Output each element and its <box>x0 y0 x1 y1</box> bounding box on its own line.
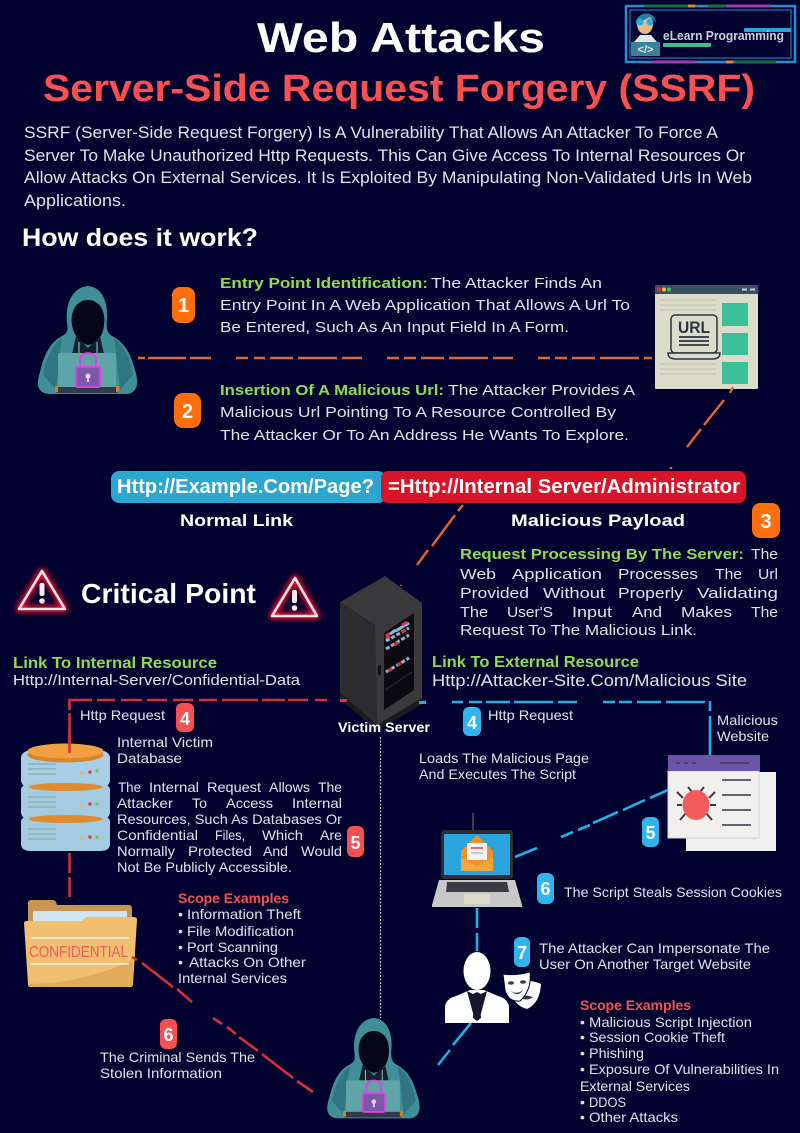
link to external resource: Http://Attacker-Site.Com/Malicious Site <box>432 672 747 690</box>
icon: confidential folder <box>24 900 137 987</box>
scope examples: external: External Services <box>580 1078 690 1094</box>
link to external resource <box>432 654 747 690</box>
text: internal request explanation: Are <box>320 827 342 843</box>
label: internal victim database: Database <box>117 750 182 766</box>
label: malicious website: Malicious <box>717 712 778 728</box>
badge 3: 3 <box>760 511 772 533</box>
arrow: browser to link <box>671 387 733 469</box>
title: Web Attacks <box>257 14 545 61</box>
badge 6 blue: 6 <box>540 879 551 899</box>
scope examples: external: • <box>580 1029 585 1045</box>
badge 4 red: 4 <box>180 709 190 729</box>
icon: theatre masks <box>503 972 541 1009</box>
scope examples: external <box>580 997 779 1125</box>
badge 7: 7 <box>517 943 527 963</box>
text: loads the malicious page: Loads The Malicious Page <box>419 750 589 766</box>
icon: server rack <box>340 576 426 731</box>
text: script steals cookies: The Script Steals Session Cookies <box>564 884 782 900</box>
arrow: database to folder <box>68 853 71 897</box>
text: internal request explanation: Confidential <box>117 827 198 843</box>
step 3 text: The <box>751 546 778 563</box>
icon: warning triangle left <box>19 571 65 609</box>
step 3 text: Validating <box>697 585 778 602</box>
arrow: server to internal database <box>70 700 347 753</box>
text: internal request explanation: Which <box>262 827 303 843</box>
scope examples: internal: Internal Services <box>178 970 287 986</box>
step 1 text: The Attacker Finds An <box>431 275 602 292</box>
scope examples: external: Exposure Of Vulnerabilities In <box>589 1061 779 1077</box>
text: attacker impersonates user <box>539 940 770 972</box>
badge 3 <box>752 503 780 538</box>
text: internal request explanation: Protected <box>188 843 252 859</box>
text: internal request explanation: The <box>318 779 342 795</box>
icon: impersonator silhouette <box>445 952 509 1023</box>
badge 6 red <box>160 1019 177 1049</box>
line: into database <box>68 735 71 753</box>
step 2 text: The Attacker Provides A <box>448 382 635 399</box>
label: internal victim database <box>117 734 213 766</box>
link to internal resource <box>13 655 301 689</box>
link to internal resource: Link To Internal Resource <box>13 655 217 672</box>
intro paragraph: Server To Make Unauthorized Http Requests. This Can Give Access To Internal Resources Or <box>24 147 746 165</box>
logo: eLearn Programming: eLearn Programming <box>663 28 784 43</box>
badge 2 <box>174 393 201 428</box>
step 3 text: Request Processing By The Server: <box>460 546 744 563</box>
arrow: link to server <box>417 505 463 565</box>
badge 4 red <box>176 703 194 732</box>
intro paragraph: Applications. <box>24 192 126 210</box>
step 3 text: Properly <box>618 585 684 602</box>
step 1 text: Be Entered, Such As An Input Field In A Form. <box>220 319 569 336</box>
step 3 text: Input <box>572 604 613 621</box>
step 1 text <box>220 275 630 336</box>
scope examples: external: Other Attacks <box>589 1109 678 1125</box>
badge 1: 1 <box>178 295 189 317</box>
icon: confidential folder: CONFIDENTIAL <box>29 944 128 961</box>
icon: hacker bottom <box>327 1018 420 1118</box>
label: normal link: Normal Link <box>180 511 294 530</box>
scope examples: external: • <box>580 1061 585 1077</box>
step 1 text: Entry Point Identification: <box>220 275 428 292</box>
text: internal request explanation <box>117 779 342 875</box>
badge 6 red: 6 <box>163 1025 174 1045</box>
step 1 text: Entry Point In A Web Application That Allows A Url To <box>220 297 630 314</box>
scope examples: internal: • <box>178 939 183 955</box>
scope examples: external: Session Cookie Theft <box>589 1029 725 1045</box>
url bar: normal link <box>111 471 386 503</box>
scope examples: external: • <box>580 1094 585 1110</box>
step 3 text: Provided <box>460 585 529 602</box>
text: internal request explanation: Request <box>207 779 261 795</box>
icon: malicious site window with bug <box>668 755 776 851</box>
text: internal request explanation: Not Be Publicly Accessible. <box>117 859 292 875</box>
step 3 text: The <box>751 604 778 621</box>
badge 2: 2 <box>182 401 193 423</box>
step 2 text: The Attacker Or To An Address He Wants To Explore. <box>220 427 629 444</box>
arrow: malicious site to laptop <box>515 790 668 857</box>
scope examples: internal: • <box>178 954 183 970</box>
label: malicious website <box>717 712 778 744</box>
step 3 text: User'S <box>507 604 553 621</box>
scope examples: internal: File Modification <box>187 923 294 939</box>
scope examples: internal: Attacks On Other <box>189 954 306 970</box>
logo: eLearn Programming: </> <box>638 44 653 56</box>
badge 5 blue <box>642 817 659 847</box>
scope examples: external: Phishing <box>589 1045 644 1061</box>
step 3 text: Web <box>460 566 496 583</box>
arrow: dotted server to hacker <box>380 737 382 1018</box>
text: internal request explanation: Internal <box>149 779 199 795</box>
label: malicious website: Website <box>717 728 769 744</box>
step 3 text: Without <box>543 585 606 602</box>
step 3 text: Url <box>758 566 778 583</box>
scope examples: internal: Information Theft <box>187 906 301 922</box>
heading: how does it work: How does it work? <box>22 224 258 252</box>
badge 6 blue <box>537 873 554 904</box>
step 3 text: The <box>715 566 742 583</box>
step 3 text: Processes <box>618 566 698 583</box>
scope examples: external: • <box>580 1109 585 1125</box>
label: victim server: Victim Server <box>338 720 431 735</box>
url bar: malicious payload: =Http://Internal Server/Administrator <box>388 476 740 498</box>
text: internal request explanation: Files, <box>215 827 245 843</box>
scope examples: internal <box>178 890 306 986</box>
step 3 text <box>460 546 778 639</box>
step 3 text: Makes <box>681 604 732 621</box>
heading: critical point: Critical Point <box>81 578 256 609</box>
text: loads the malicious page <box>419 750 589 782</box>
icon: hacker top <box>38 286 137 394</box>
text: criminal sends stolen information: The Criminal Sends The <box>100 1049 255 1065</box>
text: criminal sends stolen information <box>100 1049 255 1081</box>
text: internal request explanation: Attacker <box>117 795 173 811</box>
badge 5 red: 5 <box>350 833 361 853</box>
link to internal resource: Http://Internal-Server/Confidential-Data <box>13 672 301 689</box>
arrow: folder to hacker <box>132 957 313 1092</box>
scope examples: internal: • <box>178 906 183 922</box>
text: internal request explanation: And <box>263 843 288 859</box>
step 3 text: The <box>460 604 488 621</box>
text: internal request explanation: Internal <box>292 795 342 811</box>
badge 5 red <box>347 826 364 857</box>
scope examples: external: • <box>580 1045 585 1061</box>
subtitle: Server-Side Request Forgery (SSRF) <box>43 68 755 110</box>
icon: database <box>21 744 110 851</box>
logo: eLearn Programming <box>626 6 795 62</box>
scope examples: external: Scope Examples <box>580 997 691 1013</box>
step 2 text: Malicious Url Pointing To A Resource Controlled By <box>220 404 617 421</box>
text: internal request explanation: Resources, Such As Databases Or <box>117 811 342 827</box>
text: internal request explanation: Access <box>226 795 273 811</box>
icon: warning triangle right <box>272 578 317 616</box>
scope examples: internal: Scope Examples <box>178 890 289 906</box>
arrow: hacker to browser <box>138 357 652 359</box>
text: internal request explanation: Would <box>301 843 342 859</box>
step 2 text: Insertion Of A Malicious Url: <box>220 382 444 399</box>
step 3 text: Application <box>512 566 602 583</box>
text: internal request explanation: To <box>192 795 207 811</box>
url bar: malicious payload <box>381 471 746 503</box>
text: attacker impersonates user: User On Another Target Website <box>539 956 751 972</box>
scope examples: external: Malicious Script Injection <box>589 1014 752 1030</box>
arrow: impersonator to hacker <box>438 1023 471 1065</box>
text: loads the malicious page: And Executes The Script <box>419 766 576 782</box>
step 3 text: Request To The Malicious Link. <box>460 622 697 639</box>
text: internal request explanation: Normally <box>117 843 175 859</box>
badge 1 <box>172 287 195 323</box>
label: http request left: Http Request <box>80 707 165 723</box>
scope examples: internal: Port Scanning <box>187 939 278 955</box>
intro paragraph: Allow Attacks On External Services. It Is Exploited By Manipulating Non-Validated Urls In Web <box>24 169 752 187</box>
scope examples: external: • <box>580 1014 585 1030</box>
link to external resource: Link To External Resource <box>432 654 639 671</box>
badge 5 blue: 5 <box>645 823 656 843</box>
label: http request right: Http Request <box>488 707 573 723</box>
badge 4 blue <box>463 707 481 736</box>
text: criminal sends stolen information: Stolen Information <box>100 1065 222 1081</box>
scope examples: external: DDOS <box>589 1094 626 1110</box>
intro paragraph: SSRF (Server-Side Request Forgery) Is A Vulnerability That Allows An Attacker To Force A <box>24 124 718 142</box>
text: internal request explanation: The <box>118 779 141 795</box>
text: internal request explanation: Allows <box>269 779 310 795</box>
text: attacker impersonates user: The Attacker Can Impersonate The <box>539 940 770 956</box>
scope examples: internal: • <box>178 923 183 939</box>
url bar: normal link: Http://Example.Com/Page? <box>117 476 374 498</box>
badge 4 blue: 4 <box>467 713 477 733</box>
icon: browser with URL <box>655 285 758 389</box>
arrow: laptop to attacker <box>476 908 478 951</box>
label: internal victim database: Internal Victim <box>117 734 213 750</box>
intro paragraph <box>24 124 752 210</box>
badge 7 <box>514 937 530 967</box>
icon: laptop with phishing envelope <box>432 813 522 907</box>
icon: browser with URL: URL <box>678 318 710 337</box>
label: malicious payload: Malicious Payload <box>511 511 685 530</box>
step 2 text <box>220 382 635 444</box>
step 3 text: And <box>632 604 662 621</box>
arrow: server to malicious site <box>420 701 710 755</box>
